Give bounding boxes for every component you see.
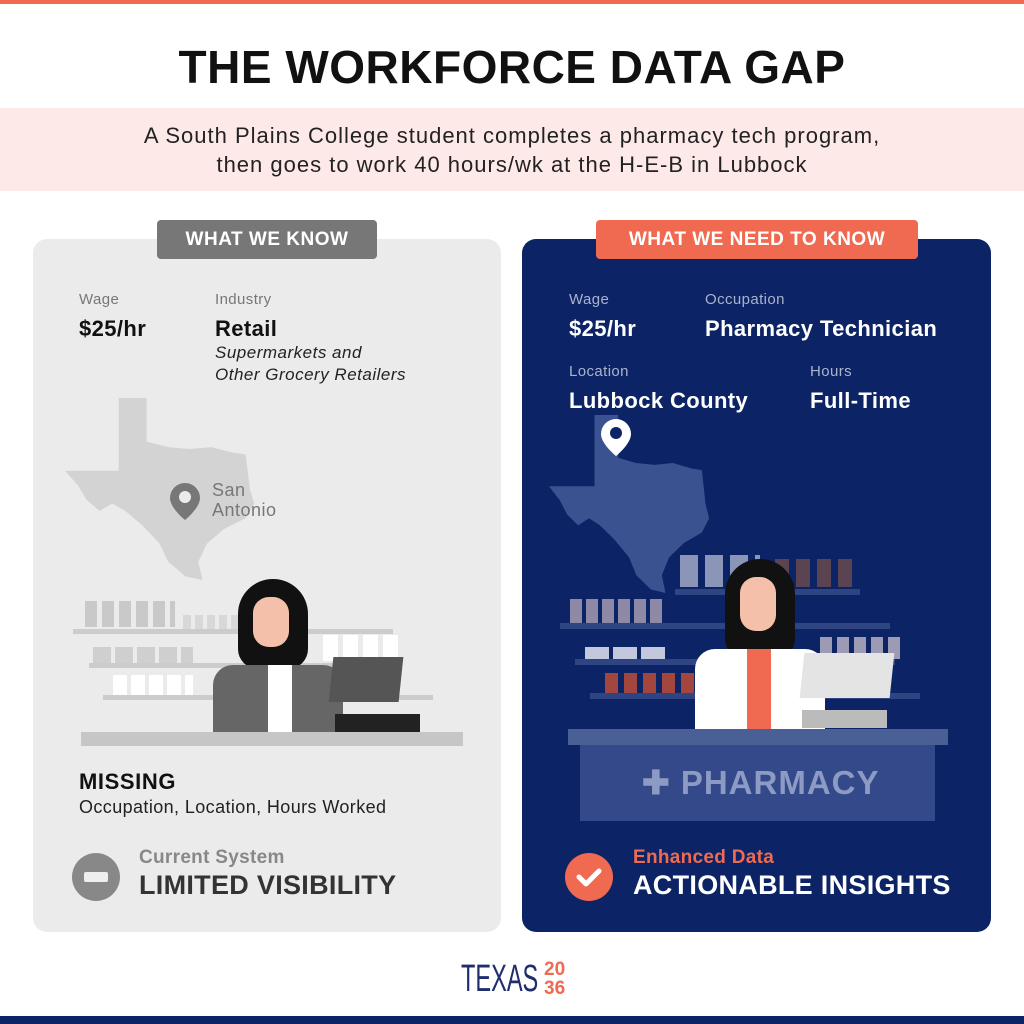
logo: texas 2036: 20 — [544, 959, 565, 980]
illustration: grocery clerk — [73, 579, 463, 746]
occupation: Pharmacy Technician — [705, 316, 937, 341]
pin san antonio — [170, 483, 200, 520]
hours — [810, 363, 911, 413]
pharmacy sign: ✚ PHARMACY — [642, 764, 880, 801]
icon: check — [565, 853, 613, 901]
subtitle band: A South Plains College student completes a pharmacy tech program, — [144, 123, 880, 148]
panel: what we know: San — [212, 480, 246, 500]
missing text: Occupation, Location, Hours Worked — [79, 797, 386, 817]
industry — [215, 291, 406, 384]
panel: what we know: Antonio — [212, 500, 277, 520]
industry: Retail — [215, 316, 277, 341]
industry: Supermarkets and — [215, 343, 362, 362]
status: limited visibility: Current System — [139, 847, 285, 868]
industry: Industry — [215, 291, 272, 308]
logo: texas 2036: TEXAS — [461, 958, 538, 1000]
status: limited visibility — [139, 847, 396, 900]
status: limited visibility: LIMITED VISIBILITY — [139, 870, 396, 900]
panel: what we know — [33, 239, 501, 932]
hours: Full-Time — [810, 388, 911, 413]
hours: Hours — [810, 363, 852, 380]
icon: minus — [72, 853, 120, 901]
map texas blue — [549, 415, 710, 593]
location: Location — [569, 363, 629, 380]
heading: what we know: WHAT WE KNOW — [186, 229, 348, 250]
wage — [79, 291, 146, 341]
subtitle band — [0, 108, 1024, 191]
pin lubbock — [601, 419, 631, 456]
location: Lubbock County — [569, 388, 748, 413]
wage: $25/hr — [569, 316, 636, 341]
map texas grey — [65, 398, 254, 580]
panel: what we need to know — [522, 239, 991, 932]
missing text: MISSING — [79, 769, 176, 794]
heading: what we need to know: WHAT WE NEED TO KNOW — [629, 229, 885, 250]
wage: Wage — [79, 291, 119, 308]
missing text — [79, 769, 386, 817]
location — [569, 363, 748, 413]
heading: what we need to know — [596, 220, 918, 259]
heading: what we know — [157, 220, 377, 259]
status: actionable insights: ACTIONABLE INSIGHTS — [633, 870, 951, 900]
wage — [569, 291, 636, 341]
status: actionable insights — [633, 847, 951, 900]
occupation — [705, 291, 937, 341]
logo: texas 2036: 36 — [544, 978, 565, 999]
wage: Wage — [569, 291, 609, 308]
illustration: pharmacist — [560, 555, 948, 821]
occupation: Occupation — [705, 291, 785, 308]
title: THE WORKFORCE DATA GAP — [179, 41, 845, 93]
status: actionable insights: Enhanced Data — [633, 847, 774, 868]
industry: Other Grocery Retailers — [215, 365, 406, 384]
subtitle band: then goes to work 40 hours/wk at the H-E-B in Lubbock — [216, 152, 808, 177]
wage: $25/hr — [79, 316, 146, 341]
